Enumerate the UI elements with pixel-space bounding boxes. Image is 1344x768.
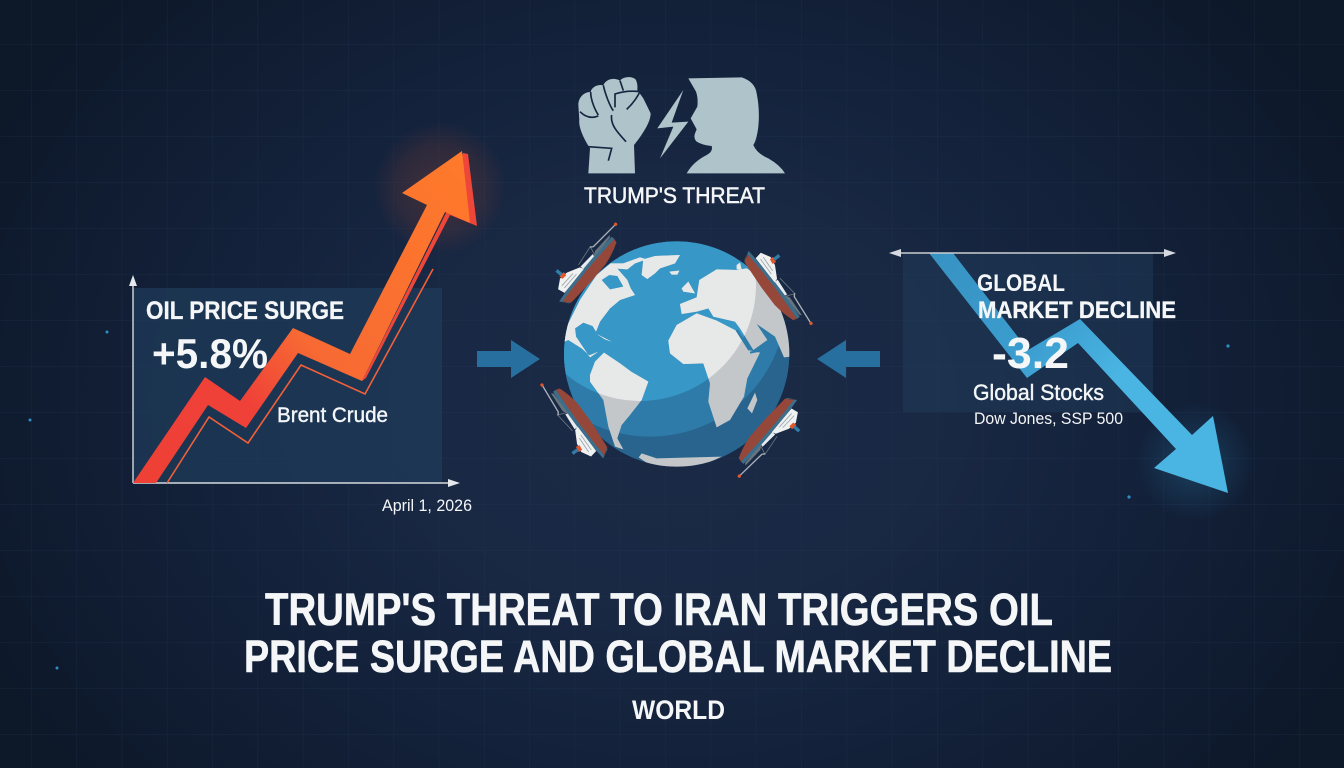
top double-headed axis (889, 249, 1176, 257)
chart axes (129, 275, 460, 487)
date label: April 1, 2026 (382, 496, 472, 515)
falling arrow (929, 253, 1228, 493)
label: Brent Crude: Brent Crude (277, 404, 388, 427)
globe (564, 241, 790, 467)
heading: OIL PRICE SURGE (146, 297, 344, 325)
icon: fist (578, 77, 651, 173)
percentage value: +5.8% (152, 330, 268, 377)
background particles (28, 330, 1230, 670)
thin trend line (167, 269, 433, 483)
heading (977, 270, 1176, 324)
title: TRUMP'S THREAT TO IRAN TRIGGERS OIL (265, 584, 1053, 635)
arrow: right pointing to globe (817, 340, 880, 378)
arrow glow (374, 122, 506, 254)
ship: top right (739, 238, 825, 336)
panel: global market decline (889, 249, 1255, 522)
panel: oil price surge (129, 122, 506, 515)
globe with ships (540, 222, 813, 478)
heading: GLOBAL (977, 270, 1065, 297)
icon: head silhouette (687, 77, 785, 173)
label: Global Stocks: Global Stocks (973, 380, 1104, 405)
heading: MARKET DECLINE (978, 297, 1176, 324)
ship: bottom left (528, 373, 613, 471)
label: indices: Dow Jones, SSP 500 (974, 409, 1123, 428)
arrow glow (1135, 402, 1255, 522)
title: PRICE SURGE AND GLOBAL MARKET DECLINE (244, 631, 1112, 682)
icon: fist, lightning and head (578, 77, 785, 173)
icon: lightning bolt (657, 90, 688, 158)
chart backing panel (903, 253, 1153, 412)
chart backing panel (133, 288, 442, 483)
rising arrow (133, 151, 477, 483)
percentage value: -3.2 (992, 329, 1069, 378)
arrow: left pointing to globe (477, 340, 540, 378)
ship: bottom right (725, 392, 814, 488)
label: Trump's threat: TRUMP'S THREAT (584, 183, 765, 208)
ship: top left (542, 213, 630, 309)
title (244, 584, 1112, 682)
subtitle: world: WORLD (632, 695, 725, 725)
